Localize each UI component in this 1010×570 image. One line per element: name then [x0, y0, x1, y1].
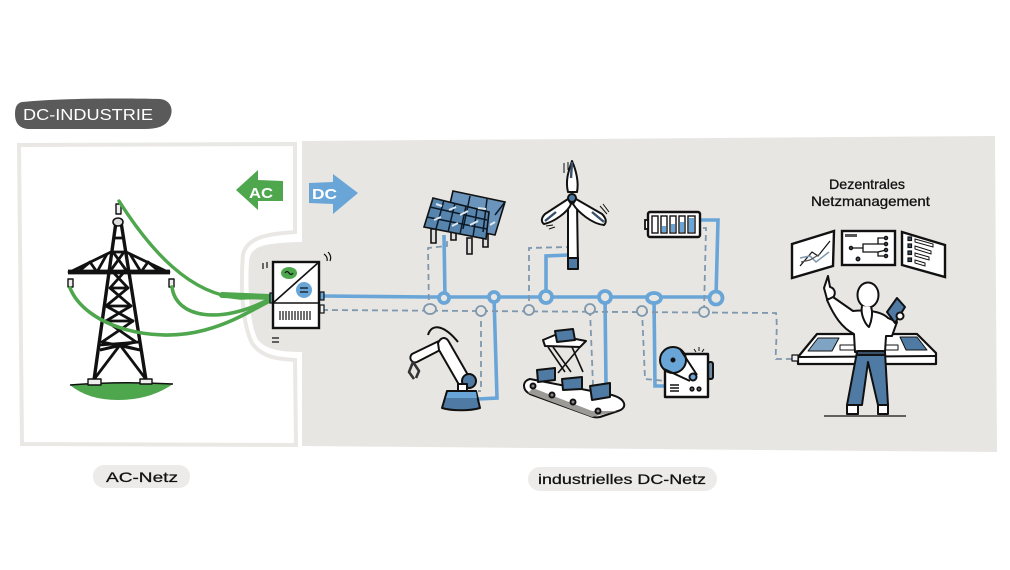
icon: operator	[824, 276, 906, 416]
panel: industrial DC grid	[248, 136, 997, 452]
text: Dezentrales Netzmanagement	[811, 176, 930, 209]
screen: network diagram	[842, 231, 895, 265]
icon: robot arm	[409, 327, 480, 410]
screen: chart	[792, 231, 834, 278]
text: Dezentrales Netzmanagement: Netzmanagement	[811, 193, 930, 209]
icon: motor machine	[660, 347, 713, 397]
title pill	[15, 98, 172, 129]
title pill: DC-INDUSTRIE	[23, 107, 153, 124]
icon: conveyor with boxes	[524, 329, 624, 417]
icon: solar panels	[424, 191, 505, 254]
arrow: AC: AC	[249, 185, 273, 202]
icon: control console	[792, 334, 936, 364]
DC nodes	[439, 291, 722, 304]
label: AC-Netz	[93, 465, 190, 488]
icon: inverter	[263, 252, 331, 342]
arrow: DC: DC	[312, 186, 337, 203]
ground	[70, 383, 173, 400]
DC power bus	[322, 220, 718, 399]
screen: list	[902, 232, 945, 277]
AC cables	[70, 201, 270, 335]
text: Dezentrales Netzmanagement: Dezentrales	[829, 176, 905, 192]
label: industrielles DC-Netz: industrielles DC-Netz	[538, 471, 706, 487]
panel: AC grid outline	[19, 144, 296, 445]
icon: wind turbine	[542, 161, 609, 269]
icon: transmission tower	[68, 204, 174, 400]
arrow: DC	[309, 174, 358, 214]
label: AC-Netz: AC-Netz	[106, 469, 178, 485]
label: industrielles DC-Netz	[528, 467, 717, 491]
data network dashed	[322, 228, 792, 391]
icon: battery	[645, 212, 700, 237]
data nodes	[424, 304, 709, 317]
arrow: AC	[236, 170, 283, 210]
